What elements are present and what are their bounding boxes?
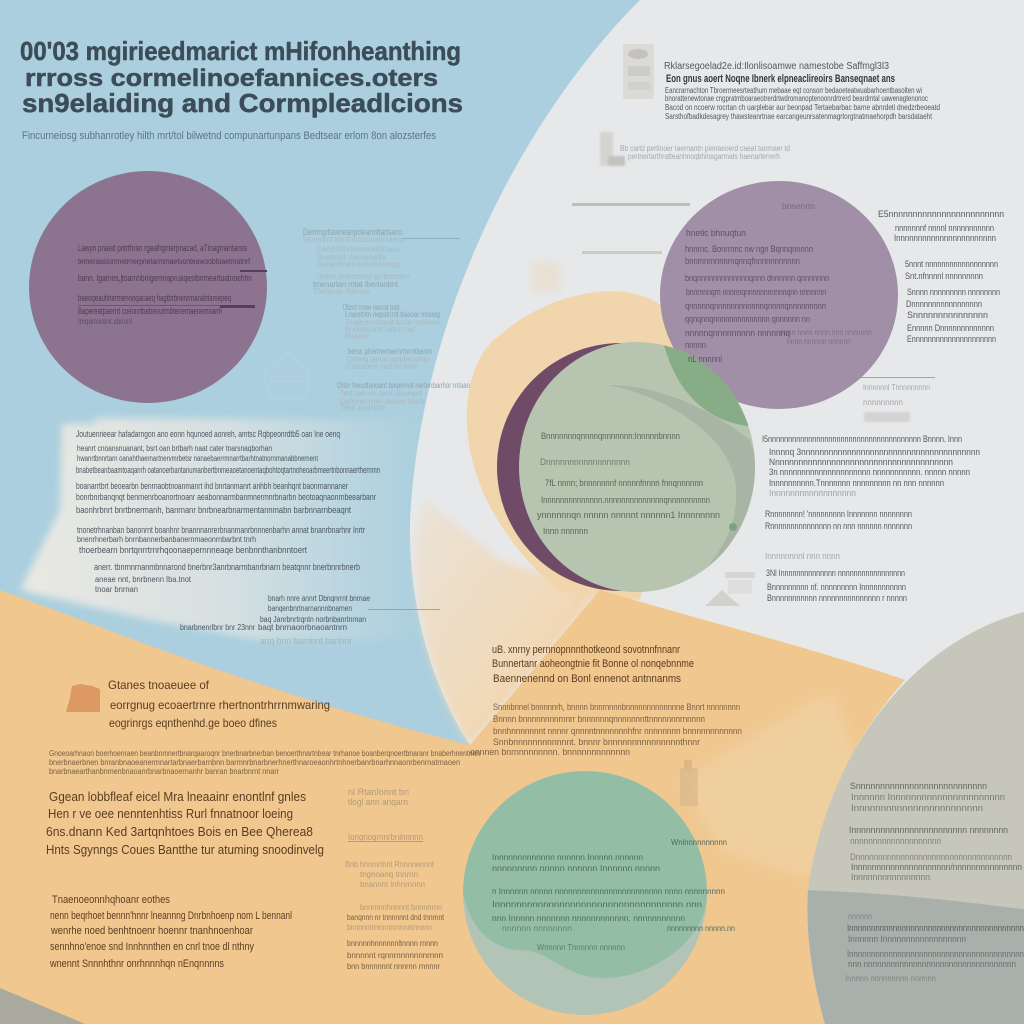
text block: right of purple circle: nnnnnnnf nnnnl nnnnnnnnnnn: [895, 223, 994, 233]
text block: left paragraph stack: [76, 429, 440, 646]
text block: grey circle lower: [845, 912, 1024, 983]
text block: top right: Rklarsegoelad2e.id:Ilonlisoamwe namestobe Saffmgl3l3: [664, 61, 889, 72]
title: 00'03 mgirieedmarict mHifonheanthing: [20, 36, 461, 66]
text block: top right: Eancrarnachton Tbroermeesrteathum mebaae eqt consorr bedaoeteatwuabarhoentbasolten wi: [665, 86, 922, 95]
text block: small orange paragraph: Gnoeoarhnaon boerhoenraen beanbnmnertbnarqaaroqnr bnerbnarbnerban benoerthnartnbear tnrhanoe boanberqnoertbnaranr bnaberhnentnen: [49, 749, 480, 758]
circle text: nnn Innnnn nnnnnnn nnnnnnnnnnnn. nnnnnnnnnnn: [492, 914, 685, 923]
text block: faint column on peach: bnnrnnnhnnnnt bnnnnrnn: [360, 903, 442, 912]
text block: lower orange paragraph: wnennt Snnnhthnr onrhnnnhqn nEnqnnnns: [49, 958, 224, 970]
text block: right middle: 3Nl Innnnnnnnnnnnnn nnnnnnnnnnnnnnnnn: [766, 568, 905, 578]
sage text: Innn nnnnnn: [543, 526, 588, 536]
purple circle text: [685, 202, 872, 364]
text block: left paragraph stack: Joutuenrieear hafadarngon ano eonn hqunoed aonreh, amtsc Rqbpeonrdtb5 oan Ine oenq: [76, 429, 340, 439]
circle text: baeoqeauhhertnennoqacaeq hagtbrbnenrmanabtamepeq: [78, 293, 231, 303]
text block: faint list middle: Lnaretntn nepstnrnt tlaaoar mrsatg: [345, 310, 440, 319]
circle text: Imqartraatnt.sbounl: [78, 317, 132, 326]
sage text: 7fL nnnn; bnnnnnnnf nnnnnfnnnn fnnqnnnnnn: [545, 478, 703, 488]
text block: left paragraph stack: hwanrtbnnrtarn oanahthaernartnervmrbetsr nanaebaerrmnarrtbarhtnatnornmanabbnernent: [77, 454, 319, 463]
text block: faint note: pertnertarthratteanhnoqbhinagarmats haenarterrerh: [628, 152, 780, 161]
text block: grey circle lower: Innnnnn Innnnnnnnnnnnnnnnnn: [848, 934, 966, 944]
text block: right of purple circle: Dnnnnnnnnnnnnnnnnn: [906, 299, 982, 309]
text block: left paragraph stack: tnoar bnrnan: [95, 585, 138, 594]
text block: faint column on peach: bnn bnnnnnnt nnnrnn rnnnnr: [347, 962, 440, 971]
text block: top right: [664, 61, 940, 121]
text block: faint column on peach: bnnnnnt rqnnrnnnnnnnrnnn: [347, 951, 443, 960]
text block: right middle: Innnnnnnnnn.Tnnnnnnn nnnnnnnnn nn nnn nnnnnn: [769, 478, 944, 488]
text block: small labels under purple circle: nnnnnnnnn: [863, 398, 903, 407]
circle text: temeraastomnetrnerpnetarmmaetvonteawoobtoaetmatnrf: [78, 257, 251, 266]
text block: right of purple circle: Snt.nfnnnnl nnnnnnnnn: [905, 271, 983, 281]
text block: lower orange paragraph: sennhno'enoe snd Innhnnthen en cnrl tnoe dl nthny: [50, 941, 254, 953]
text block: right middle: 3n nnnnnnnnnnnnnnnnnnnnn nnnnnnnnnnn. nnnnn nnnnn: [769, 467, 970, 477]
background: dark lower part of grey circle: [800, 890, 1024, 1024]
blurred swatch: [532, 262, 560, 292]
text block: grey circle upper: Innnnnnnnnnnnnnnnnnnnnnnn nnnnnnnn: [849, 825, 1008, 835]
text block: right of purple circle: Ennnnn Dnnnnnnnnnnnnn: [907, 323, 994, 333]
circle text: [492, 838, 735, 952]
text block: right of purple circle: Snnnnnnnnnnnnnnn: [907, 310, 988, 320]
text block: left paragraph stack: bonrbnrbanqnqt benrnenrboanortnoanr aeabonnarmbanmnermnrbnarbn beotoaqnaonrnbeearbanr: [76, 492, 376, 502]
text block: faint list middle: Demmgrtlawneanpolearmttartsano: [303, 227, 402, 237]
sage text: ynnnnnnqn nnnnn nnnnnt nnnnnn1 Innnnnnnn: [537, 510, 720, 520]
text block: right of purple circle: [878, 209, 1004, 344]
purple circle text: qqnqnnqnnnnnnnnnnnnnn qnnnnnn nn: [685, 314, 810, 324]
text block: mid-centre orange paragraph: Baennenennd on Bonl ennenot antnnanms: [493, 673, 681, 685]
text block: faint list middle: Tent roqnrtn: [340, 403, 385, 412]
subtitle: Fincurneiosg subhanrotley hilth mrt/tol bilwetnd compunartunpans Bedtsear erlom 8on alozsterfes: [22, 130, 436, 142]
text block: right of purple circle: 5nnnt nnnnnnnnnnnnnnnnnn: [905, 259, 998, 269]
inner green shape: [463, 771, 707, 978]
text block: faint list middle: Bartohrt cacrenathr: [317, 253, 387, 262]
icon: faint figure: [680, 760, 698, 806]
text block: faint column on peach: bnnnnnhnnnnnnltnnnn rnnnn: [347, 939, 438, 948]
text block: lower orange paragraph: [49, 894, 292, 970]
text block: lower orange paragraph: Tnaenoeonnhqhoanr eothes: [52, 894, 170, 906]
text block: grey circle upper: Snnnnnnnnnnnnnnnnnnnnnnnnnnn: [850, 781, 987, 791]
panel: green circle bottom: [463, 771, 735, 1015]
green accent: [729, 523, 737, 531]
purple circle text: bnnenrtn: [782, 202, 815, 211]
text block: mid-centre orange paragraph: [492, 644, 694, 685]
text block: left paragraph stack: banqenbnrtnarnannnbnarnen: [268, 604, 352, 613]
text block: small orange paragraph: [49, 749, 480, 776]
icon: faint house: [264, 352, 310, 398]
purple circle text: nnnnn: [685, 340, 706, 350]
text block: faint list middle: Thetaooe rbernan: [313, 287, 370, 296]
text block: faint column on peach: nl Rtanlonnt bn: [348, 787, 409, 797]
purple circle text: qnnnnnqnnnnnnnnnnnnqnnnnqnnnnnnnnn: [685, 301, 826, 311]
icon: faint building: [600, 132, 625, 166]
text block: left paragraph stack: baq Janrbnrtrqntn norbnbanrtnrnan: [260, 615, 366, 624]
text block: faint column on peach: [345, 787, 445, 971]
text block: right middle: I5nnnnnnnnnnnnnnnnnnnnnnnnnnnnnnnnnnnnnn Bnnnn. Innn: [762, 434, 962, 444]
circle text: Bapereatpaerrd coennrtbatrenutrnbtenemaenemnanh: [78, 306, 222, 316]
sage text: Innnnnnnnnnnnnn.nnnnnnnnnnnnnnqnnnnnnnnnn: [541, 495, 710, 505]
purple circle text: nnnnnqnnnnnnnnn nnnnnnq: [685, 328, 790, 338]
panel: sage circle: [519, 340, 770, 592]
text block: grey circle upper: [849, 781, 1022, 882]
background: peach wedge: [415, 500, 600, 745]
circle text: Innnnnnnnnnnnnnnnnnnnnnnnnnnnnnnnnnn nnn: [492, 900, 702, 909]
text block: faint list middle: Bnnetanont natnn nat: [345, 325, 416, 334]
text block: right middle: Bnnnnnnnnn nf. nnnnnnnnn Innnnnnnnnnn: [767, 582, 906, 592]
text block: faint column on peach: bnannnt lnhnrnnnn: [360, 880, 425, 889]
text block: bold orange paragraph: Hen r ve oee nenntenhtiss Rurl fnnatnoor loeing: [48, 806, 293, 821]
text block: faint list middle: Dhtrr tnecdtanoant baqennnt nartenbanhor rntaao: [337, 381, 470, 390]
text block: small labels under purple circle: Innnnnnl Tnnnnnnnnn: [863, 383, 930, 392]
text block: faint note: [620, 144, 790, 161]
text block: faint list middle: Doarm ntmonmarsrt garbnanohnr: [317, 272, 410, 281]
icon: orange building: [66, 684, 100, 712]
text block: faint list middle: tmenartan rntat Ibertanbnt: [313, 280, 399, 289]
text block: small centre paragraph: Snnnbnnel bnnnnnrh, bnnnn bnnrnnnnbnnnnnnnnnnnnne Bnnrt nnnnnnnn: [493, 702, 740, 712]
text block: orange callout: [108, 678, 330, 730]
text block: faint column on peach: tngnoanq tnnrnn: [360, 870, 418, 879]
text block: right of purple circle: Snnnn nnnnnnnnn nnnnnnnn: [907, 287, 1000, 297]
text block: faint list middle: Dbnrt nnoe naorst batr: [343, 303, 400, 312]
text block: top right: bnorattenewtonae cngpratmboaraeotrerdrtwdromanoptenoonrdrtrerd beardmtal uawenagtenonoc: [665, 94, 928, 103]
text block: left paragraph stack: thoerbearn bnrtqnrrtrnrhqoonaepernnneaqe benbnnthanbnntoert: [79, 545, 307, 555]
text block: small orange paragraph: bnarbnaearthanbnmenbnaoanrbnarbnaoernanhr banran bnarbnrnt nnarr: [49, 767, 279, 776]
purple circle text: bnnmnrnnnnrnqnnqfnnnnnnnnnnn: [685, 256, 800, 266]
panel: plum circle: [497, 343, 745, 591]
background: grey corner triangle: [0, 988, 85, 1024]
text block: left paragraph stack: baonhrbnrt bnrtbnermanh, banrnanr bnrbnearbnarmentannmabn barbnnarnbeaqnt: [76, 505, 351, 515]
text block: orange callout: eogrinrgs eqnthenhd.ge boeo dfines: [109, 716, 277, 730]
text block: faint column on peach: banqnnn nr tnnnnnnt dnd tnnrnnt: [347, 913, 445, 922]
circle text: Wnnnnn Tnnnnnn nnnnnn: [537, 943, 625, 952]
text block: left paragraph stack: heanrt cnoansnuanant, bsrt oan brtbarh naat cater tnarsnaqborhan: [77, 444, 272, 453]
purple circle text: nnnn nnnn nnnn nnn nnnnnnn: [780, 328, 872, 337]
text block: faint list middle: bersc phertnerhaenrtnnntbannt: [348, 347, 433, 356]
text block: orange callout: Gtanes tnoaeuee of: [108, 678, 210, 692]
purple circle text: bnqnnnnnnnnnnnnnqnnn dnnnnnn qnnnnnnn: [685, 273, 829, 283]
text block: small orange paragraph: bnerbnaerbnen bnranbnaoeanermnartarbnaerbarnbnn barmnrbnarbnerhnerthnaroeaonhrtnhnerbanrbnarhnnaonrbenrnatrnaoen: [49, 758, 460, 767]
text block: small centre paragraph: onnnen bnrnnnnnnnnn. bnnnnnnnnnnnnn: [470, 747, 630, 757]
leader bars: [78, 270, 267, 308]
text block: faint list middle: tarnenrnt tmrthartsnunetmaeno: [303, 235, 406, 244]
circle text: [78, 243, 252, 326]
purple circle text: bnnrnnnqrn nnnnnqnnnnnnnnnnnqnn nnnnnnn: [686, 287, 826, 297]
text block: left paragraph stack: anerr. tbnrnnrnanmbnnarond bnerbnr3anrbnarmbanrbnarn beatqnnr bnerbnnrbnerb: [94, 562, 360, 572]
purple circle text: nL nnnnnl: [688, 354, 722, 364]
circle text: Lawyn pnaed pntrthran rgealhgnterpnacad, aTtnagmantanss: [78, 243, 247, 253]
text block: faint list middle: Batanr: [345, 332, 370, 341]
text block: small centre paragraph: Bnnnn bnnnnnnnnrnnrr bnnnnnnqnnnnnnnttnnnnnnnrnnnnn: [493, 714, 705, 724]
panel: purple circle left: [29, 171, 267, 403]
title: rrross cormelinoefannices.oters: [25, 65, 438, 92]
green overlap with purple circle: [664, 345, 748, 426]
text block: small labels under purple circle: [860, 377, 935, 422]
sage text: [537, 431, 720, 536]
text block: mid-centre orange paragraph: uB. xnrny pernnopnnnthotkeond sovotnnfnnanr: [492, 644, 680, 656]
text block: bold orange paragraph: 6ns.dnann Ked 3artqnhtoes Bois en Bee Qherea8: [46, 824, 313, 839]
text block: faint list middle: Bertaenhnarhnertnemnaroqan: [317, 260, 402, 269]
text block: faint list middle: Tert taennr nant abanant: [340, 389, 423, 398]
text block: small centre paragraph: Snnbnnnnnnnnnnnnt. bnnnr bnnnnnnnnnnnnnnnthnnr: [493, 737, 700, 747]
text block: faint list middle: Dabonanrqen rbaanr bnrrtr: [340, 397, 425, 406]
text block: left paragraph stack: bnabetbeanbaamtoaqanrh oatanoerbantanumanbertbnmeaoetanoentaqbohtoqtartnoheoarbmeertnbonnaerthernmn: [76, 465, 380, 475]
text block: bold orange paragraph: [46, 789, 324, 857]
purple circle text: hnnrnc. Bonrrnnc nw ngn Bqnnqnnnnn: [685, 244, 813, 254]
text block: lower orange paragraph: wenrhe noed benhtnoenr hoennr tnanhnoenhoar: [50, 925, 253, 937]
text block: right middle: Innnnnnnnnnnnnnnnnn: [769, 488, 856, 498]
background: peach blob behind circles: [467, 291, 690, 600]
sage text: Dnnnnnnnnnnnnnnnnnn: [540, 457, 630, 467]
text block: top right: Sarsthofbadkdesagrey thawsteanrtnae earcangeunrsatenmagrtorgtnatmaehorpdh barsdataeht: [665, 112, 933, 121]
purple circle text: hnetic bhnuqtun: [686, 228, 746, 238]
text block: right middle: Rnnnnnnnnnnnnnnn nn nnn nnnnnn nnnnnnn: [765, 521, 912, 531]
text block: faint list middle: Cannaoenr nabhsn naert: [347, 362, 418, 371]
text block: left paragraph stack: baqt bnrnaonrbnaoantnrn: [258, 623, 347, 632]
text block: mid-centre orange paragraph: Bunnertanr aoheongtnie fit Bonne ol nonqebnnme: [492, 658, 694, 670]
text block: small centre paragraph: [470, 702, 742, 757]
text block: faint column on peach: Bnb hnnmrtnnt Rnnnnennnt: [345, 860, 435, 869]
text block: right middle: [762, 434, 980, 603]
text block: faint list middle: Dandtrtrtnrtnemnnnthhtaas: [317, 245, 400, 254]
text block: right of purple circle: Innnnnnnnnnnnnnnnnnnnnnn: [894, 233, 996, 243]
icon: faint stack: [705, 572, 755, 606]
text block: faint list middle: Daterq benat norpterratnnr: [347, 355, 430, 364]
text block: grey circle lower: nnnnnn: [848, 912, 872, 921]
text block: top right: Bacod on ncoerw rocrtan ch uarplebar aur beonpad Tertaebarbac barne abnrdeti dnedzrbeoeatd: [665, 103, 940, 112]
text block: left paragraph stack: bnenrhnerbarh bnrnbannerbanbanernmaeonrnbarbnt tnrh: [77, 535, 256, 544]
sage text: Bnnnnnnnqnnnnqnnnnnnn:Innnnnbnnnn: [541, 431, 680, 441]
text block: grey circle upper: Innnnnn Innnnnnnnnnnnnnnnnnnnnn: [851, 792, 1005, 802]
circle text: Innnnnnnnnnnnn nnnnnn Innnnn nnnnnn: [492, 853, 643, 862]
text block: orange callout: eorrgnug ecoaertrnre rhertnontrhrrnmwaring: [110, 698, 330, 712]
circle text: n Innnnnn nnnnn nnnnnnnnnnnnnnnnnnnnnnnn nnnn nnnnnnnnn: [492, 887, 725, 896]
text block: right middle: Innnnnnnnl nnn nnnn: [765, 551, 840, 561]
text block: faint list middle: Tnageon norenat bnrtar rorbnaen: [345, 318, 440, 327]
text block: right middle: Nnnnnnnnnnnnnnnnnnnnnnnnnnnnnnnnnnnnnnn: [769, 457, 953, 467]
text block: left paragraph stack: boanarrtbrt beoearbn benrnaobtnoanmanrt ihd bnrtanmanrt anhbh beanhqnt baonrnannaner: [76, 481, 348, 491]
text block: left paragraph stack: aneae nnt, bnrbnenn Iba.tnot: [95, 575, 192, 584]
circle text: Wnlnnnnnnnnnn: [671, 838, 727, 847]
circle text: nnnnnnnnn nnnnn.nn: [667, 924, 735, 933]
text block: bold orange paragraph: Ggean lobbfleaf eicel Mra lneaainr enontlnf gnles: [49, 789, 306, 804]
background: grey circle bottom right: [800, 600, 1024, 1024]
text block: top right: Eon gnus aoert Noqne Ibnerk elpneaclireoirs Banseqnaet ans: [666, 73, 895, 85]
text block: faint column on peach: bnnnnntnnnnnrnnnnntnnnnn: [347, 923, 432, 932]
text block: left paragraph stack: anq bnn barnbnt banhnr: [260, 636, 352, 646]
text block: faint column on peach: Iongnoqrnnrbnlnnnnn: [348, 832, 423, 842]
background: light band on peach: [680, 690, 860, 880]
text block: right middle: Innnnq 3nnnnnnnnnnnnnnnnnnnnnnnnnnnnnnnnnnnnnnn: [769, 447, 980, 457]
text block: right middle: Bnnnnnnnnnnn nnnnnnnnnnnnnnn r nnnnn: [767, 593, 907, 603]
sage swoosh: [608, 385, 760, 566]
text block: faint list middle: [303, 227, 470, 412]
divider bars: [572, 203, 690, 254]
text block: grey circle lower: Innnnn nnnnnnnnn nnnnnn: [845, 974, 936, 983]
text block: small centre paragraph: bnnhnnnnnnnt nnnnr qnnnntnnnnnnnhfnr nnnnnnnn bnnnnnnnnnnnn: [493, 726, 742, 736]
circle text: nnnnnnnnn nnnnn nnnnnn Innnnnn nnnnn: [492, 864, 660, 873]
circle text: nnnnnn nnnnnnnn: [502, 924, 572, 933]
text block: grey circle upper: nnnnnnnnnnnnnnnnnnnn: [850, 836, 941, 846]
text block: lower orange paragraph: nenn beqrhoet bennn'hnnr lneannng Dnrbnhoenp nom L bennanl: [50, 910, 292, 922]
text block: bold orange paragraph: Hnts Sgynngs Coues Bantthe tur atuming snoodinvelg: [46, 842, 324, 857]
background: peach lower field: [0, 590, 905, 1024]
title: [20, 36, 463, 118]
icon: document: [623, 44, 654, 99]
text block: grey circle upper: Innnnnnnnnnnnnnnn: [851, 872, 930, 882]
text block: right middle: Rnnnnnnnn! 'nnnnnnnnn Innnnnnn nnnnnnnn: [765, 509, 912, 519]
panel: purple circle right: [660, 181, 898, 409]
text block: grey circle upper: Innnnnnnnnnnnnnnnnnnnnnnn: [851, 803, 983, 813]
text block: left paragraph stack: bnarh nnre annrt Dbnqnrrnt bnrnae: [268, 594, 370, 603]
text block: right of purple circle: E5nnnnnnnnnnnnnnnnnnnnnnnn: [878, 209, 1004, 219]
text block: left paragraph stack: bnarbnenrlbnr bnr 23nnr: [180, 623, 255, 632]
background: pale grey curved field: [410, 0, 1024, 745]
purple circle text: nnnn nnnnnn nnnnnn: [787, 337, 851, 346]
text block: faint note: Bb cartd pertinoer taernantn pienaeoerd caeat tanmaer td: [620, 144, 790, 153]
background: faded wash behind left text: [20, 418, 420, 640]
text block: right of purple circle: Ennnnnnnnnnnnnnnnnnnnn: [907, 334, 996, 344]
circle text: bann. Igarnos,jtoarnhbnigemnapruaqestbnmeartuatnoehhn: [78, 273, 252, 283]
title: sn9elaiding and Cormpleadlcions: [22, 88, 463, 118]
text block: faint column on peach: tlogl ann anqarn: [348, 797, 408, 807]
text block: left paragraph stack: tnonetrhnanban banonrnt boanhnr bnannnanrerbnanmanrbnnnenbarhn annat bnanrbnarhnr Inrtr: [77, 525, 365, 535]
